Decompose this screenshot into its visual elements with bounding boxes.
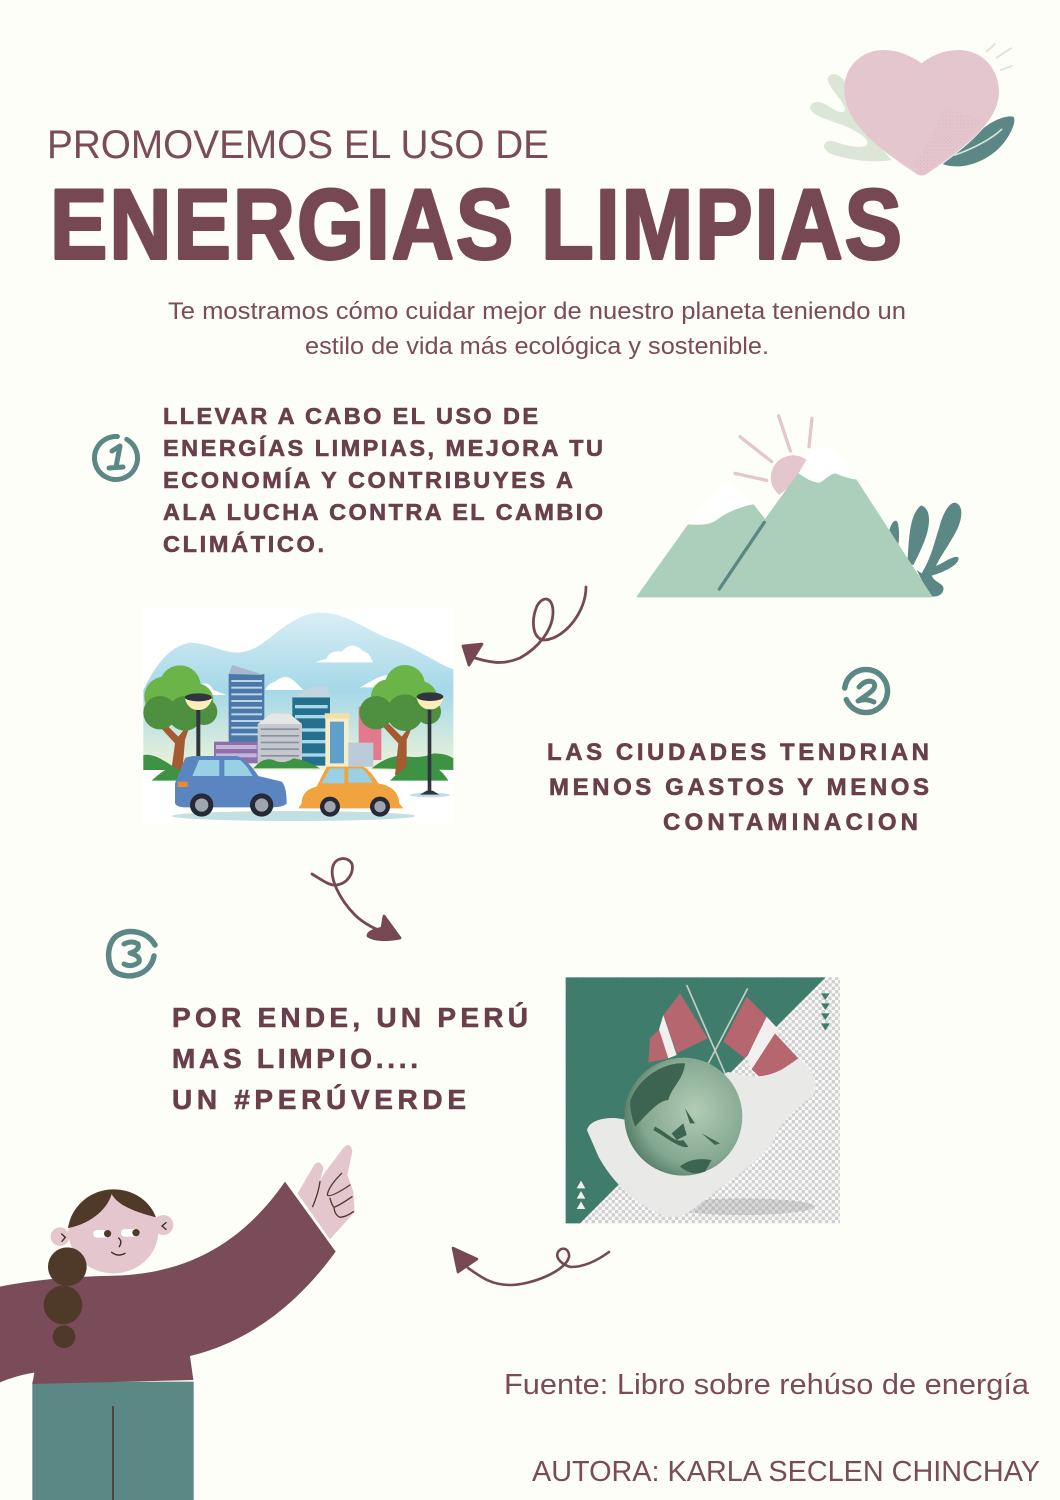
image: city with cars illustration xyxy=(143,608,453,823)
text block: step 3: POR ENDE, UN PERÚ xyxy=(172,1002,528,1033)
text block: step 2: MENOS GASTOS Y MENOS xyxy=(549,774,929,801)
text block: step 1 xyxy=(163,403,603,557)
trousers xyxy=(32,1382,194,1500)
text block: step 3 xyxy=(172,1002,528,1115)
title: main heading: ENERGIAS LIMPIAS xyxy=(50,169,902,280)
title: intro line: PROMOVEMOS EL USO DE xyxy=(47,123,549,167)
text block: step 2: LAS CIUDADES TENDRIAN xyxy=(547,739,929,766)
image: globe in hand with flags xyxy=(566,977,840,1223)
hand xyxy=(588,1060,814,1216)
icon: mountains with sun xyxy=(637,416,961,597)
flags xyxy=(648,985,798,1082)
arrow: mountains to city xyxy=(463,587,586,665)
arrow: city to step 3 xyxy=(312,859,400,940)
text block: step 1: ECONOMÍA Y CONTRIBUYES A xyxy=(163,466,573,493)
head xyxy=(51,1189,173,1273)
tree: left xyxy=(143,665,217,780)
text block: step 3: UN #PERÚVERDE xyxy=(172,1084,466,1115)
car: blue xyxy=(175,756,287,817)
street lamps xyxy=(185,692,450,797)
text: author: AUTORA: KARLA SECLEN CHINCHAY xyxy=(532,1456,1040,1488)
text: source: Fuente: Libro sobre rehúso de energía xyxy=(504,1369,1030,1401)
globe xyxy=(624,1058,742,1176)
text block: step 1: CLIMÁTICO. xyxy=(163,530,324,557)
text block: step 1: ENERGÍAS LIMPIAS, MEJORA TU xyxy=(163,434,603,461)
braid xyxy=(44,1247,87,1348)
icon: step number 2 xyxy=(842,667,890,715)
icon: heart with leaves xyxy=(810,44,1014,176)
car: orange xyxy=(298,767,403,817)
text block: step 2: CONTAMINACION xyxy=(663,809,918,836)
icon: step number 3 xyxy=(109,932,155,976)
text block: subtitle: estilo de vida más ecológica y sostenible. xyxy=(305,333,769,360)
text block: step 2 xyxy=(547,739,929,836)
text block: step 3: MAS LIMPIO.... xyxy=(172,1043,418,1074)
tree: right xyxy=(359,665,441,775)
corner triangles xyxy=(821,993,830,1031)
text block: step 1: LLEVAR A CABO EL USO DE xyxy=(163,403,538,429)
arrow: globe to step 3 xyxy=(453,1248,609,1285)
hand xyxy=(298,1146,354,1238)
icon: step number 1 xyxy=(87,429,145,487)
figure: person pointing xyxy=(0,1146,354,1500)
text block: subtitle xyxy=(168,298,906,360)
sweater xyxy=(0,1182,336,1384)
text block: step 1: ALA LUCHA CONTRA EL CAMBIO xyxy=(163,499,603,525)
text block: subtitle: Te mostramos cómo cuidar mejor de nuestro planeta teniendo un xyxy=(168,298,906,325)
